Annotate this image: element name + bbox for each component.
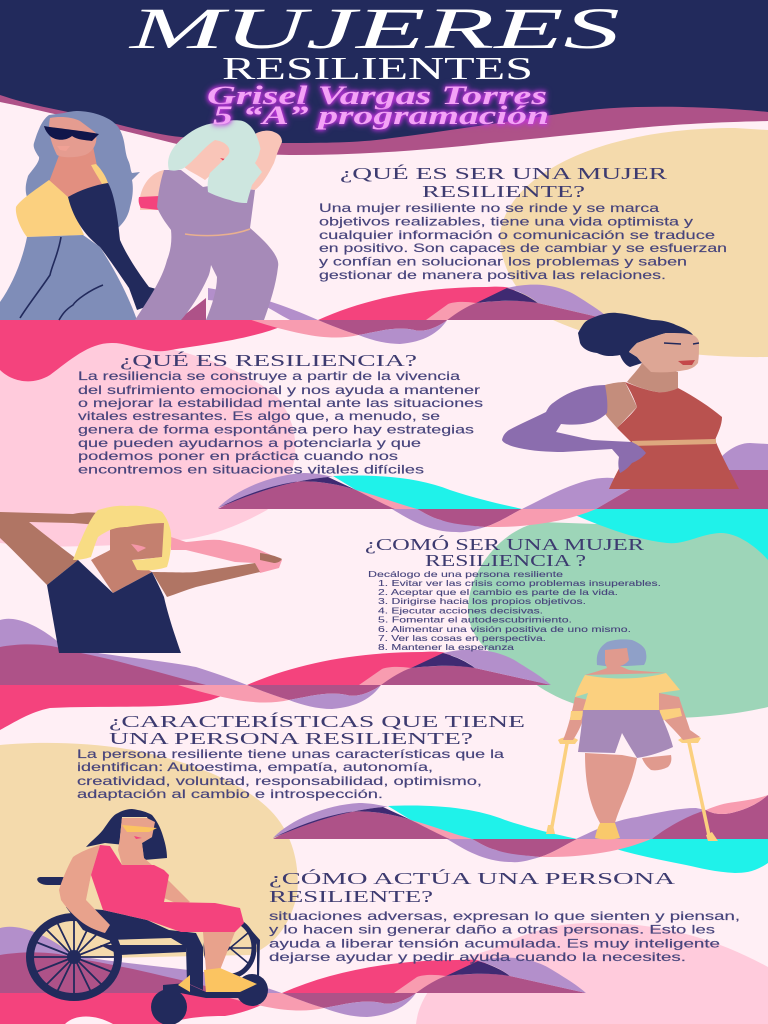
list: decalogue: 5. Fomentar el autodescubrimiento. (378, 614, 572, 624)
heading: section 4: ¿CARACTERÍSTICAS QUE TIENE (109, 712, 525, 731)
list: decalogue: 4. Ejecutar acciones decisivas. (378, 606, 543, 616)
text block: section 4 (77, 747, 504, 801)
text block: section 2: que pueden ayudarnos a potenciarla y que (78, 436, 421, 450)
text block: section 4: adaptación al cambio e introspección. (77, 787, 383, 801)
heading: section 2: ¿QUÉ ES RESILIENCIA? (120, 351, 417, 370)
wave: fifth divider (0, 927, 586, 1024)
list: decalogue: 8. Mantener la esperanza (378, 642, 514, 652)
heading: section 1 (340, 164, 668, 201)
heading: section 5: ¿CÓMO ACTÚA UNA PERSONA (269, 869, 676, 888)
icon: wheelchair frame (37, 877, 260, 1000)
wave: first divider (0, 285, 611, 381)
blob: pink bottom right (416, 923, 768, 1024)
figure: woman with prosthetic arm (502, 313, 739, 489)
figure: woman with sunglasses (0, 111, 160, 320)
text block: section 1: y confían en solucionar los problemas y saben (319, 254, 687, 268)
list: decalogue: Decálogo de una persona resiliente (368, 569, 563, 579)
figure: woman with crutches (546, 639, 718, 841)
text block: section 5: situaciones adversas, expresan lo que sienten y piensan, (269, 909, 740, 923)
text block: section 5: dejarse ayudar y pedir ayuda cuando la necesites. (269, 950, 686, 964)
wave: second divider (218, 443, 768, 560)
text block: section 1: cualquier información o comunicación se traduce (319, 228, 715, 242)
text block: section 2: vitales estresantes. Es algo que, a menudo, se (78, 409, 440, 423)
text block: section 2: genera de forma espontánea pero hay estrategias (78, 422, 474, 436)
text block: section 1: objetivos realizables, tiene una vida optimista y (319, 214, 693, 228)
heading: section 4: UNA PERSONA RESILIENTE? (109, 729, 473, 748)
text block: section 1: gestionar de manera positiva las relaciones. (319, 268, 666, 282)
list: decalogue (368, 569, 661, 652)
figure: woman in wheelchair (30, 809, 268, 1024)
heading: section 1: ¿QUÉ ES SER UNA MUJER (340, 164, 668, 183)
list: decalogue: 6. Alimentar una visión positiva de uno mismo. (378, 624, 631, 634)
text block: section 2: La resiliencia se construye a partir de la vivencia (78, 369, 460, 383)
blob: pink left (0, 340, 295, 546)
text block: section 2: encontremos en situaciones vitales difíciles (78, 462, 424, 476)
list: decalogue: 1. Evitar ver las crisis como problemas insuperables. (378, 578, 661, 588)
class group: 5 “A” programación (213, 101, 549, 130)
section 1: what is a resilient woman (319, 164, 727, 282)
section 2: what is resilience (78, 351, 483, 476)
figure: woman with mint hair (135, 120, 282, 320)
section 3: how to be a resilient woman (365, 535, 661, 652)
text block: section 5: ayuda a liberar tensión acumulada. Es muy inteligente (269, 936, 721, 950)
author name: Grisel Vargas Torres (207, 81, 547, 110)
blob: green right (468, 522, 768, 718)
list: decalogue: 2. Aceptar que el cambio es parte de la vida. (378, 587, 618, 597)
wave: third divider (0, 619, 551, 730)
text block: section 2: o mejorar la estabilidad mental ante las situaciones (78, 396, 483, 410)
section 5: how a resilient person acts (269, 869, 740, 964)
text block: section 2: del sufrimiento emocional y nos ayuda a mantener (78, 383, 480, 397)
list: decalogue: 7. Ver las cosas en perspectiva. (378, 633, 546, 643)
heading: section 1: RESILIENTE? (422, 182, 585, 201)
list: decalogue: 3. Dirigirse hacia los propios objetivos. (378, 596, 586, 606)
text block: section 4: identifican: Autoestima, empatía, autonomía, (77, 760, 433, 774)
subtitle: RESILIENTES (222, 50, 533, 86)
text block: section 4: creatividad, voluntad, responsabilidad, optimismo, (77, 774, 482, 788)
text block: section 1 (319, 201, 727, 282)
heading: section 3: ¿COMÓ SER UNA MUJER (365, 535, 645, 554)
text block: section 2 (78, 369, 483, 476)
heading: section 3 (365, 535, 645, 570)
text block: section 1: en positivo. Son capaces de cambiar y se esfuerzan (319, 241, 727, 255)
text block: section 2: podemos poner en práctica cuando nos (78, 449, 398, 463)
heading: section 5 (269, 869, 676, 906)
header band (0, 0, 768, 155)
text block: section 5: y lo hacen sin generar daño a otras personas. Esto les (269, 922, 715, 936)
section 4: characteristics (77, 712, 525, 801)
icon: wheelchair wheels (30, 917, 254, 997)
heading: section 5: RESILIENTE? (269, 887, 433, 906)
wave: fourth divider (273, 795, 768, 873)
heading: section 3: RESILIENCIA ? (425, 551, 586, 570)
blob: beige top right (500, 128, 768, 357)
text block: section 4: La persona resiliente tiene unas características que la (77, 747, 504, 761)
text block: section 1: Una mujer resiliente no se rinde y se marca (319, 201, 659, 215)
text block: section 5 (269, 909, 740, 964)
heading: section 4 (109, 712, 525, 748)
figure: blonde woman (0, 506, 282, 653)
blob: beige bottom left (0, 743, 298, 960)
